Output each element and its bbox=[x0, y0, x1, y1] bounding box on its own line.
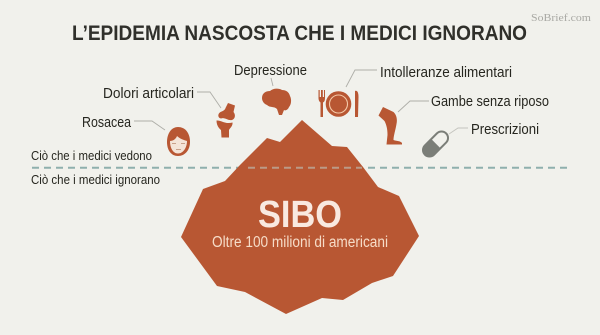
dashed waterline bbox=[32, 167, 568, 169]
symptom: rosacea bbox=[82, 114, 190, 156]
symptom: restless legs bbox=[378, 93, 549, 144]
icon: face bbox=[167, 127, 190, 156]
icon: pill bbox=[420, 129, 451, 159]
iceberg label: SIBO: SIBO bbox=[258, 194, 342, 236]
label: ignored causes: Ciò che i medici ignorano bbox=[31, 172, 160, 187]
symptom: food intolerances bbox=[318, 64, 512, 117]
symptom: prescriptions: Prescrizioni bbox=[471, 121, 539, 138]
symptom: rosacea: Rosacea bbox=[82, 114, 132, 131]
symptom: food intolerances: Intolleranze alimentari bbox=[380, 64, 512, 81]
symptom: joint pain: Dolori articolari bbox=[103, 85, 194, 102]
symptom: prescriptions bbox=[420, 121, 539, 159]
symptom: restless legs: Gambe senza riposo bbox=[431, 93, 549, 110]
watermark: SoBrief.com bbox=[531, 12, 591, 24]
symptom: depression: Depressione bbox=[234, 62, 307, 79]
symptom: joint pain bbox=[103, 85, 235, 138]
icon: leg bbox=[378, 107, 402, 144]
icon: brain bbox=[262, 89, 291, 115]
symptom: depression bbox=[234, 62, 307, 115]
title: L’EPIDEMIA NASCOSTA CHE I MEDICI IGNORANO bbox=[72, 22, 527, 45]
dashed waterline over iceberg bbox=[248, 167, 362, 169]
iceberg sublabel: Oltre 100 milioni di americani bbox=[212, 234, 388, 251]
label: visible symptoms: Ciò che i medici vedono bbox=[31, 148, 152, 163]
icon: plate and cutlery bbox=[318, 90, 358, 117]
iceberg bbox=[181, 120, 419, 314]
icon: knee joint bbox=[216, 103, 235, 138]
